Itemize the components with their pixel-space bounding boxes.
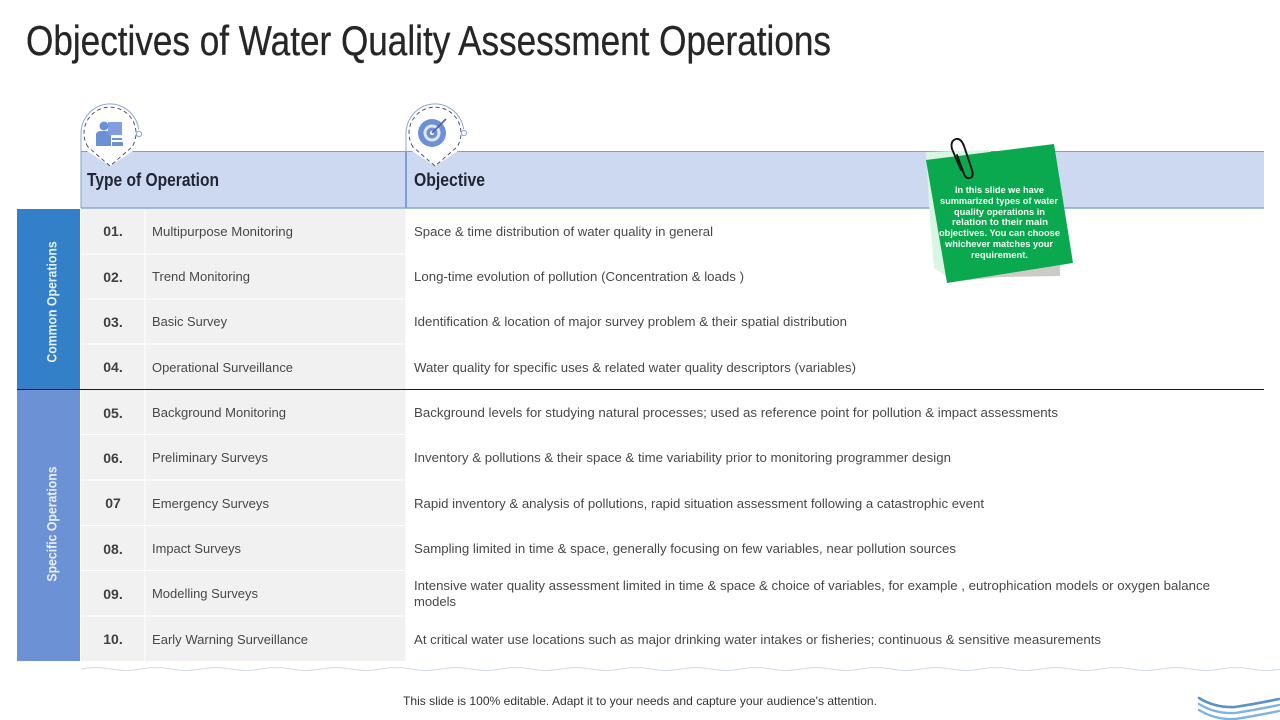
icon: water waves logo bbox=[1199, 698, 1279, 719]
row 05: Background Monitoring bbox=[152, 406, 286, 420]
row 05 bbox=[81, 390, 1058, 434]
row 01 bbox=[81, 209, 713, 254]
row 01: Multipurpose Monitoring bbox=[152, 225, 293, 239]
row 09: models bbox=[414, 595, 456, 609]
header label: type of operation: Type of Operation bbox=[87, 169, 219, 190]
side panel: specific operations: Specific Operations bbox=[44, 466, 60, 582]
row 09 bbox=[81, 571, 1210, 616]
row 01: Space & time distribution of water quality in general bbox=[414, 225, 713, 239]
row 06: 06. bbox=[103, 450, 123, 466]
row 08 bbox=[81, 526, 956, 570]
row 05: 05. bbox=[103, 405, 123, 421]
table rows bbox=[81, 209, 1210, 661]
row 02: Trend Monitoring bbox=[152, 270, 250, 284]
footer note: This slide is 100% editable. Adapt it to your needs and capture your audience's attention. bbox=[403, 694, 877, 708]
note text: In this slide we have bbox=[955, 185, 1044, 195]
row 04 bbox=[81, 344, 856, 389]
row 04: Operational Surveillance bbox=[152, 361, 293, 375]
note text bbox=[939, 185, 1060, 260]
row 03: 03. bbox=[103, 314, 123, 330]
row 07 bbox=[81, 480, 985, 525]
row 08: Sampling limited in time & space, generally focusing on few variables, near pollution sources bbox=[414, 542, 956, 556]
row 05: Background levels for studying natural processes; used as reference point for pollution & impact assessments bbox=[414, 406, 1058, 420]
note text: quality operations in bbox=[954, 207, 1045, 217]
row 10 bbox=[81, 616, 1101, 661]
side panel: common operations bbox=[17, 209, 80, 389]
wavy bottom line bbox=[81, 668, 1280, 670]
row 07: 07 bbox=[105, 495, 121, 511]
row 04: Water quality for specific uses & related water quality descriptors (variables) bbox=[414, 361, 856, 375]
note text: objectives. You can choose bbox=[939, 228, 1060, 238]
row 02: Long-time evolution of pollution (Concentration & loads ) bbox=[414, 270, 744, 284]
row 08: Impact Surveys bbox=[152, 542, 241, 556]
group divider line bbox=[17, 388, 1264, 390]
row 09: 09. bbox=[103, 586, 123, 602]
note text: whichever matches your bbox=[944, 239, 1053, 249]
side panel: common operations: Common Operations bbox=[44, 241, 60, 363]
side panel: specific operations bbox=[17, 390, 80, 661]
row 03 bbox=[81, 300, 847, 344]
header label: objective: Objective bbox=[414, 169, 485, 190]
row 01: 01. bbox=[103, 223, 123, 239]
row 10: At critical water use locations such as major drinking water intakes or fisheries; continuous & sensitive measurements bbox=[414, 633, 1101, 647]
row 04: 04. bbox=[103, 359, 123, 375]
pin icon: objective bbox=[406, 103, 467, 166]
row 06: Preliminary Surveys bbox=[152, 451, 268, 465]
row 03: Basic Survey bbox=[152, 315, 228, 329]
row 07: Rapid inventory & analysis of pollutions, rapid situation assessment following a catastrophic event bbox=[414, 497, 985, 511]
pin icon: type of operation bbox=[81, 103, 142, 166]
row 10: Early Warning Surveillance bbox=[152, 633, 308, 647]
row 02: 02. bbox=[103, 269, 123, 285]
icon: paperclip bbox=[952, 139, 973, 178]
note text: requirement. bbox=[971, 250, 1028, 260]
row 07: Emergency Surveys bbox=[152, 497, 269, 511]
note text: summarized types of water bbox=[940, 196, 1058, 206]
row 06 bbox=[81, 435, 951, 480]
sticky note callout bbox=[926, 144, 1073, 283]
row 09: Intensive water quality assessment limited in time & space & choice of variables, for example , eutrophication models or oxygen balance bbox=[414, 579, 1210, 593]
row 09: Modelling Surveys bbox=[152, 587, 258, 601]
note text: relation to their main bbox=[952, 217, 1048, 227]
row 06: Inventory & pollutions & their space & time variability prior to monitoring programmer design bbox=[414, 451, 951, 465]
table header band bbox=[81, 151, 1264, 208]
row 10: 10. bbox=[103, 631, 123, 647]
row 08: 08. bbox=[103, 541, 123, 557]
row 03: Identification & location of major survey problem & their spatial distribution bbox=[414, 315, 847, 329]
title: Objectives of Water Quality Assessment Operations bbox=[26, 17, 831, 64]
row 02 bbox=[81, 254, 744, 298]
